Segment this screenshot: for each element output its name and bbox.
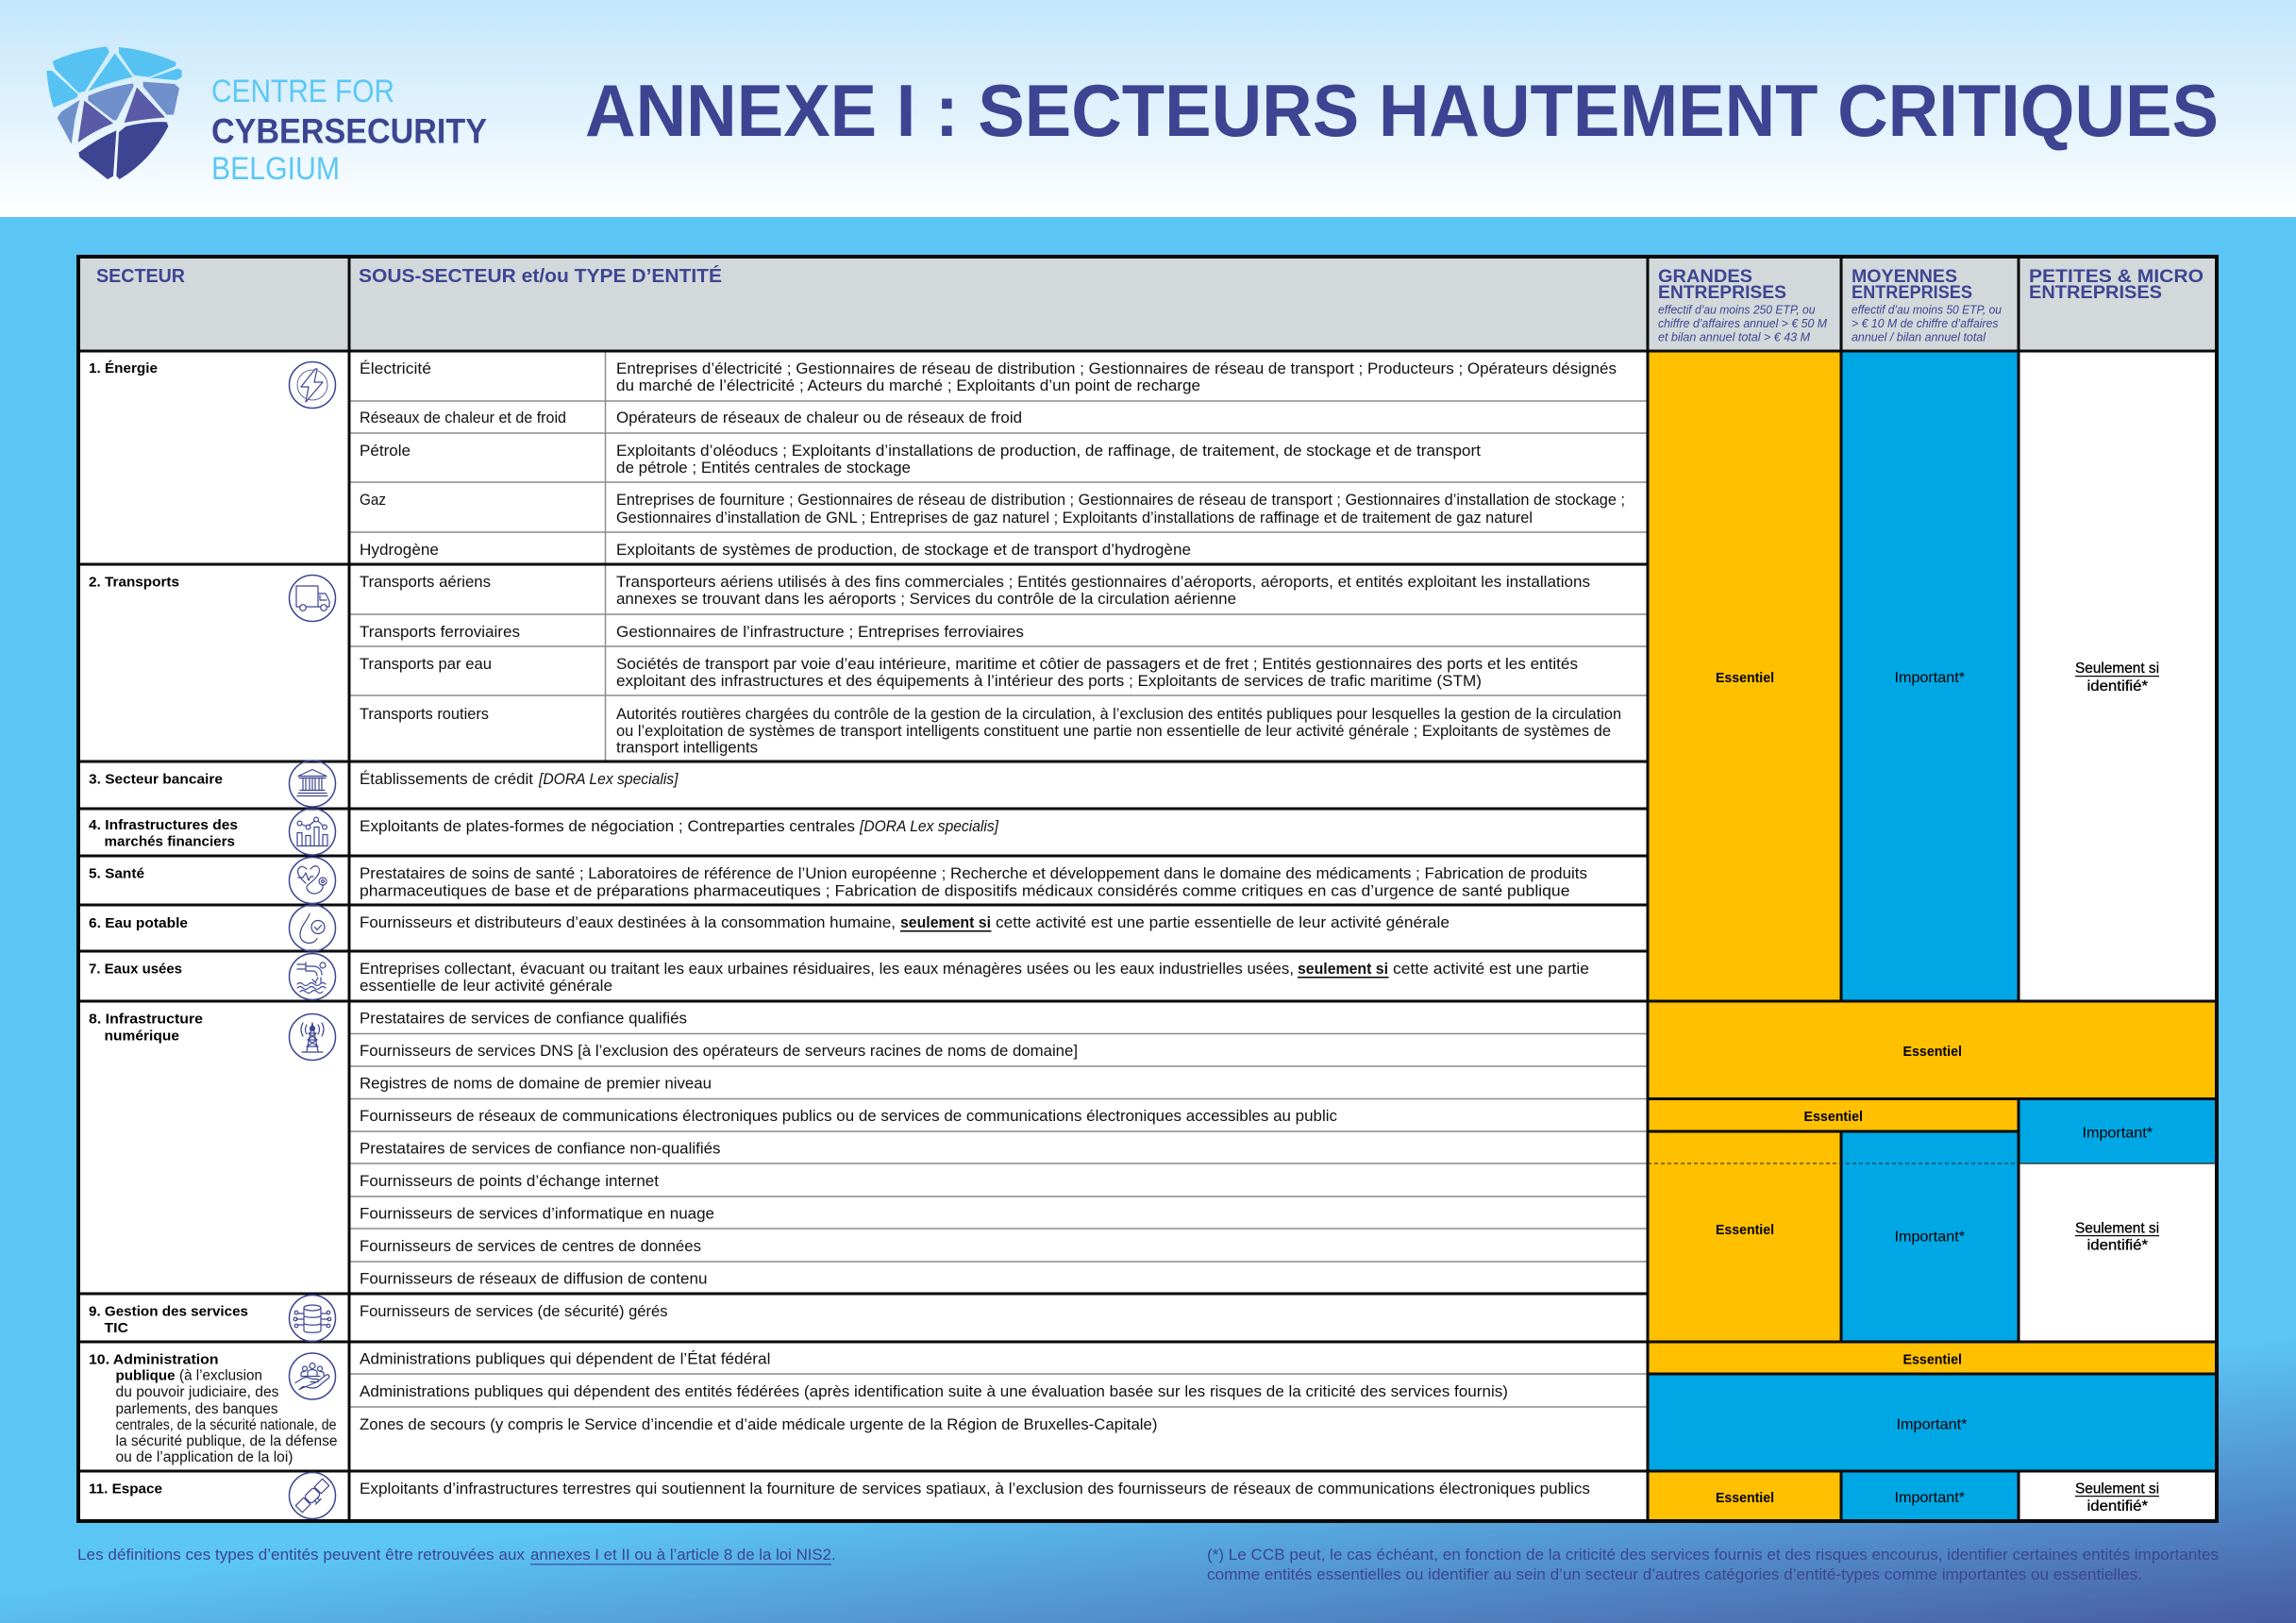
label: seulement si identifié numerique: Seulement si: [2075, 1221, 2159, 1236]
subsector rows: Gestionnaires de l’infrastructure ; Entreprises ferroviaires: [616, 624, 1024, 641]
emphasis: seulement si: seulement si: [1298, 961, 1388, 978]
subsector rows: [360, 1349, 1508, 1433]
heading: petites et micro entreprises: PETITES & MICRO: [2029, 267, 2204, 287]
status labels: [1716, 661, 2159, 1514]
heading: grandes entreprises: et bilan annuel total > € 43 M: [1658, 330, 1810, 343]
sector name: 4. Infrastructures des: [89, 817, 238, 833]
icon: truck: [289, 576, 336, 621]
subsector rows: Sociétés de transport par voie d’eau intérieure, maritime et côtier de passagers et de fret ; Entités gestionnaires des ports et les entités: [616, 656, 1578, 673]
description: Fournisseurs de services (de sécurité) gérés: [360, 1303, 668, 1320]
sector name: 7. Eaux usées: [89, 961, 182, 978]
subsector rows: de pétrole ; Entités centrales de stockage: [616, 460, 911, 477]
description: pharmaceutiques de base et de préparations pharmaceutiques ; Fabrication de dispositifs médicaux considérés comme critiques en cas d’urgence de santé publique: [360, 883, 1570, 900]
label: seulement si identifié: identifié*: [2087, 678, 2148, 694]
heading: moyennes entreprises: ENTREPRISES: [1852, 283, 1972, 303]
sector name: [89, 1351, 338, 1465]
subsector rows: [360, 574, 1621, 757]
subsector rows: Transports routiers: [360, 706, 489, 723]
subsector rows: Autorités routières chargées du contrôle de la gestion de la circulation, à l’exclusion des entités publiques pour lesquelles la gestion de la circulation: [616, 706, 1621, 723]
label: important petites: Important*: [2082, 1125, 2153, 1142]
icon: bank: [289, 761, 336, 807]
footnote: definitions: [77, 1547, 836, 1564]
description: cette activité est une partie essentielle de leur activité générale: [996, 914, 1450, 931]
sector 1 energie: [89, 360, 1625, 559]
icon: stethoscope heart: [289, 857, 336, 904]
icon: antenna tower: [289, 1013, 336, 1061]
subsector rows: Prestataires de services de confiance qualifiés: [360, 1010, 687, 1027]
description: Exploitants de plates-formes de négociation ; Contreparties centrales: [360, 818, 855, 835]
subsector rows: Fournisseurs de réseaux de diffusion de contenu: [360, 1270, 708, 1287]
subsector rows: Pétrole: [360, 443, 411, 460]
sector name: [89, 817, 238, 849]
title: ANNEXE I : SECTEURS HAUTEMENT CRITIQUES: [585, 69, 2219, 152]
sector 2 transports: [89, 574, 1621, 757]
label: seulement si identifié: Seulement si: [2075, 661, 2159, 677]
label: seulement si identifié espace: identifié*: [2087, 1498, 2148, 1514]
description: [360, 770, 679, 788]
sector name: (à l’exclusion: [179, 1368, 262, 1383]
label: essentiel numerique: Essentiel: [1902, 1044, 1962, 1060]
label: essentiel espace: Essentiel: [1716, 1490, 1774, 1506]
heading: petites et micro entreprises: [2029, 267, 2204, 303]
subsector rows: Réseaux de chaleur et de froid: [360, 410, 566, 427]
subsector rows: exploitant des infrastructures et des équipements à l’intérieur des ports ; Exploitants de services de trafic maritime (STM): [616, 673, 1482, 690]
table: [78, 257, 2217, 1521]
sector name: 10. Administration: [89, 1351, 219, 1368]
sector 8 infrastructure numerique: [89, 1010, 1337, 1287]
subsector rows: Fournisseurs de services d’informatique en nuage: [360, 1206, 714, 1223]
heading: moyennes entreprises: [1852, 267, 2002, 343]
subsector rows: [360, 360, 1625, 559]
footnote: definitions: .: [831, 1547, 836, 1564]
icon: hand with people: [289, 1353, 336, 1399]
sector 10 administration publique: [89, 1349, 1508, 1465]
heading: moyennes entreprises: effectif d’au moins 50 ETP, ou: [1852, 302, 2002, 317]
icon: database network: [289, 1295, 336, 1342]
icon: waste water pipe: [289, 953, 336, 1000]
subsector rows: Hydrogène: [360, 542, 439, 559]
subsector rows: Transports ferroviaires: [360, 624, 520, 641]
sector 5 sante: [89, 857, 1587, 904]
subsector rows: du marché de l’électricité ; Acteurs du marché ; Exploitants d’un point de recharge: [616, 377, 1200, 394]
subsector rows: Transports par eau: [360, 656, 492, 673]
subsector rows: transport intelligents: [616, 740, 758, 757]
heading: grandes entreprises: ENTREPRISES: [1658, 283, 1786, 303]
sector name: parlements, des banques: [115, 1401, 278, 1417]
subsector rows: Fournisseurs de services de centres de données: [360, 1238, 701, 1255]
subsector rows: Zones de secours (y compris le Service d’incendie et d’aide médicale urgente de la Région de Bruxelles-Capitale): [360, 1416, 1157, 1433]
sector name: [89, 1012, 203, 1044]
label: important moyennes: Important*: [1895, 670, 1965, 686]
header band: [0, 0, 2296, 217]
sector 11 espace: [89, 1472, 1590, 1519]
subsector rows: Entreprises d’électricité ; Gestionnaires de réseau de distribution ; Gestionnaires de réseau de transport ; Producteurs ; Opérateurs désignés: [616, 360, 1617, 377]
sector name: marchés financiers: [104, 834, 235, 849]
description: Prestataires de soins de santé ; Laboratoires de référence de l’Union européenne ; Recherche et développement dans le domaine des médicaments ; Fabrication de produits: [360, 865, 1587, 882]
subsector rows: Administrations publiques qui dépendent des entités fédérées (après identification suite à une évaluation basée sur les risques de la criticité des services fournis): [360, 1383, 1508, 1400]
subsector rows: Entreprises de fourniture ; Gestionnaires de réseau de distribution ; Gestionnaires de réseau de transport ; Gestionnaires d’installation de stockage ;: [616, 492, 1625, 509]
table background: [78, 257, 2217, 1521]
label: seulement si identifié espace: Seulement si: [2075, 1481, 2159, 1497]
subsector rows: Exploitants de systèmes de production, de stockage et de transport d’hydrogène: [616, 542, 1191, 559]
label: seulement si identifié numerique: identifié*: [2087, 1238, 2148, 1253]
icon: logo shield: [46, 46, 182, 179]
icon: water drop with check: [289, 905, 336, 951]
heading: moyennes entreprises: > € 10 M de chiffre d’affaires: [1852, 316, 1999, 330]
sector 6 eau potable: [89, 905, 1450, 951]
description: [360, 914, 1450, 932]
emphasis: seulement si: seulement si: [900, 914, 991, 931]
sector name: 1. Énergie: [89, 360, 158, 376]
footnote: asterisk note: comme entités essentielles ou identifier au sein d’un secteur d’autres catégories d’entité-types comme importantes ou essentielles.: [1207, 1566, 2142, 1583]
footnote: asterisk note: [1207, 1547, 2219, 1583]
description: Exploitants d’infrastructures terrestres qui soutiennent la fourniture de services spatiaux, à l’exclusion des fournisseurs de réseaux de communications électroniques publics: [360, 1481, 1590, 1498]
subsector rows: ou l’exploitation de systèmes de transport intelligents constituent une partie non essentielle de leur activité générale ; Exploitants de systèmes de: [616, 723, 1611, 740]
logo wordmark: CENTRE FOR: [211, 74, 394, 109]
sector name: la sécurité publique, de la défense: [115, 1433, 338, 1449]
footnote: definitions: Les définitions ces types d’entités peuvent être retrouvées aux: [77, 1547, 526, 1564]
sector name: ou de l’application de la loi): [115, 1449, 293, 1465]
subsector rows: Transports aériens: [360, 574, 491, 591]
subsector rows: Administrations publiques qui dépendent de l’État fédéral: [360, 1349, 770, 1368]
sector name: 3. Secteur bancaire: [89, 772, 223, 787]
subsector rows: annexes se trouvant dans les aéroports ; Services du contrôle de la circulation aérienne: [616, 591, 1236, 608]
sector name: 9. Gestion des services: [89, 1304, 248, 1319]
heading: secteur: SECTEUR: [96, 266, 186, 287]
label: important administration: Important*: [1897, 1417, 1967, 1432]
subsector rows: Gaz: [360, 492, 386, 509]
sector name: 5. Santé: [89, 866, 144, 881]
heading: grandes entreprises: [1658, 267, 1827, 343]
subsector rows: Fournisseurs de services DNS [à l’exclusion des opérateurs de serveurs racines de noms de domaine]: [360, 1043, 1078, 1060]
label: essentiel grandes et moyennes: Essentiel: [1804, 1109, 1863, 1125]
logo: [46, 46, 487, 187]
logo wordmark: [211, 74, 487, 187]
description: [DORA Lex specialis]: [538, 771, 679, 788]
sector 9 gestion des services TIC: [89, 1295, 668, 1342]
label: essentiel grandes numerique: Essentiel: [1716, 1222, 1774, 1238]
label: important espace: Important*: [1895, 1490, 1965, 1506]
logo wordmark: CYBERSECURITY: [211, 111, 487, 151]
icon: satellite: [289, 1472, 336, 1519]
description: essentielle de leur activité générale: [360, 978, 612, 995]
link: annexes: annexes I et II ou à l’article 8 de la loi NIS2: [530, 1547, 831, 1564]
sector 7 eaux usees: [89, 953, 1589, 1000]
icon: lightning bolt: [289, 362, 336, 408]
heading: grandes entreprises: effectif d’au moins 250 ETP, ou: [1658, 302, 1816, 317]
icon: bar chart: [289, 809, 336, 855]
heading: column headers: [96, 265, 2204, 343]
sector name: centrales, de la sécurité nationale, de: [115, 1417, 336, 1433]
footnote: asterisk note: (*) Le CCB peut, le cas échéant, en fonction de la criticité des services fournis et des risques encourus, identifier certaines entités importantes: [1207, 1547, 2219, 1564]
subsector rows: Opérateurs de réseaux de chaleur ou de réseaux de froid: [616, 410, 1022, 427]
subsector rows: Prestataires de services de confiance non-qualifiés: [360, 1140, 721, 1157]
label: essentiel grandes: Essentiel: [1716, 670, 1774, 686]
description: Établissements de crédit: [360, 770, 533, 788]
heading: sous-secteur: SOUS-SECTEUR et/ou TYPE D’ENTITÉ: [359, 265, 722, 287]
heading: moyennes entreprises: MOYENNES: [1852, 267, 1957, 287]
subsector rows: Registres de noms de domaine de premier niveau: [360, 1076, 712, 1093]
subsector rows: Électricité: [360, 360, 431, 377]
subsector rows: Exploitants d’oléoducs ; Exploitants d’installations de production, de raffinage, de traitement, de stockage et de transport: [616, 443, 1481, 460]
sector name: numérique: [104, 1029, 179, 1044]
sector name: 6. Eau potable: [89, 915, 188, 931]
heading: grandes entreprises: chiffre d’affaires annuel > € 50 M: [1658, 316, 1827, 330]
heading: moyennes entreprises: annuel / bilan annuel total: [1852, 330, 1986, 343]
sector name: 11. Espace: [89, 1481, 162, 1497]
logo wordmark: BELGIUM: [211, 151, 340, 187]
description: [DORA Lex specialis]: [859, 818, 998, 835]
label: important moyennes numerique: Important*: [1895, 1229, 1965, 1246]
description: Entreprises collectant, évacuant ou traitant les eaux urbaines résiduaires, les eaux ménagères usées ou les eaux industrielles usées,: [360, 961, 1294, 978]
label: seulement si identifié numerique: [2075, 1221, 2159, 1253]
status colour cells: [1648, 351, 2217, 1521]
sector 3 secteur bancaire: [89, 761, 679, 807]
sector name: TIC: [104, 1320, 128, 1336]
description: [360, 961, 1589, 995]
subsector rows: Transporteurs aériens utilisés à des fins commerciales ; Entités gestionnaires d’aéroports, aéroports, et entités exploitant les installations: [616, 574, 1590, 591]
sector name: publique: [115, 1368, 176, 1383]
sector name: 8. Infrastructure: [89, 1012, 203, 1027]
sector name: [89, 1304, 248, 1336]
description: Fournisseurs et distributeurs d’eaux destinées à la consommation humaine,: [360, 914, 896, 931]
label: seulement si identifié: [2075, 661, 2159, 694]
subsector rows: Fournisseurs de points d’échange internet: [360, 1173, 659, 1190]
heading: grandes entreprises: GRANDES: [1658, 267, 1752, 287]
sector name: du pouvoir judiciaire, des: [115, 1384, 279, 1400]
sector 4 infrastructures des marches financiers: [89, 809, 998, 855]
subsector rows: Gestionnaires d’installation de GNL ; Entreprises de gaz naturel ; Exploitants d’installations de raffinage et de traitement de gaz naturel: [616, 510, 1533, 527]
subsector rows: Fournisseurs de réseaux de communications électroniques publics ou de services de communications électroniques accessibles au public: [360, 1108, 1337, 1125]
description: cette activité est une partie: [1393, 961, 1589, 978]
heading: petites et micro entreprises: ENTREPRISES: [2029, 283, 2162, 303]
label: essentiel administration: Essentiel: [1902, 1351, 1962, 1368]
label: seulement si identifié espace: [2075, 1481, 2159, 1514]
sector name: 2. Transports: [89, 574, 179, 591]
description: [360, 865, 1587, 900]
subsector rows: [360, 1010, 1337, 1287]
